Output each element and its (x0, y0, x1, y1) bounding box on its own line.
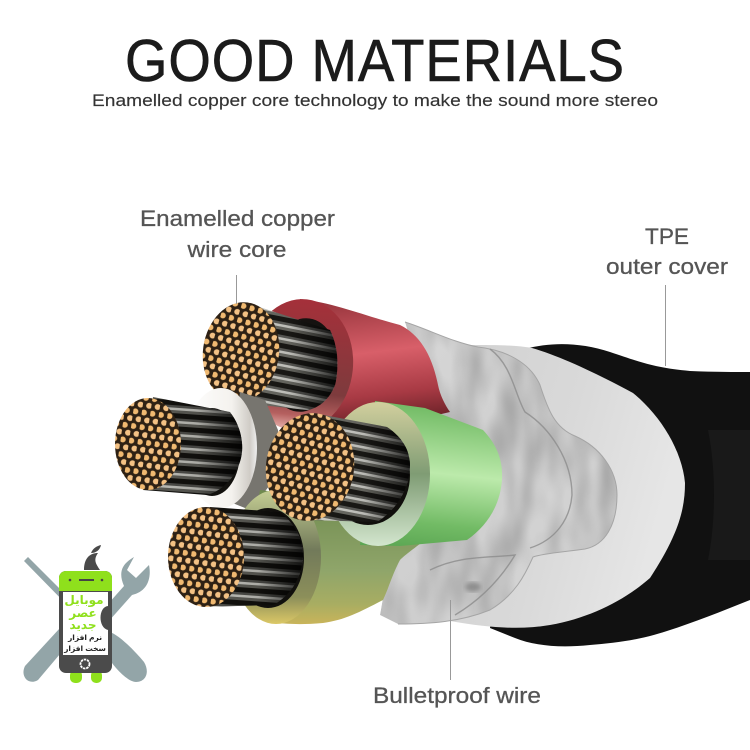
label: TPE outer cover (606, 224, 728, 279)
icon: wrench (23, 557, 150, 682)
subtitle: Enamelled copper core technology to make the sound more stereo (92, 91, 658, 110)
phone feet (70, 670, 102, 683)
phone top green (59, 571, 112, 591)
label: enamelled copper wire core: Enamelled copper (140, 206, 335, 231)
olive hole (232, 508, 304, 608)
logo text black: سخت افزار (63, 644, 106, 653)
red core copper face (196, 297, 286, 407)
label: bulletproof wire: Bulletproof wire (373, 683, 541, 708)
red core wires (233, 303, 337, 410)
icon: screwdriver (24, 557, 147, 682)
leader line: copper core (236, 275, 237, 304)
olive body (240, 490, 425, 624)
phone screen (63, 592, 108, 655)
label: enamelled copper wire core (140, 206, 335, 262)
white core wires (143, 397, 242, 495)
green core wires (307, 413, 410, 522)
green rim (326, 402, 430, 546)
white body (225, 392, 282, 510)
olive conductor (168, 490, 425, 624)
green hole (326, 425, 410, 525)
red conductor (196, 294, 450, 440)
title: GOOD MATERIALS (125, 28, 625, 94)
phone speaker (69, 579, 103, 581)
label: enamelled copper wire core: wire core (186, 237, 286, 262)
label: TPE outer cover: TPE (645, 224, 689, 249)
red body (280, 299, 450, 440)
logo text green: عصر (68, 606, 97, 620)
TPE black outer cover (490, 344, 750, 646)
leader line: bulletproof wire (450, 600, 451, 680)
logo text green: جدید (69, 618, 97, 632)
white rim (185, 388, 257, 508)
phone body (59, 571, 112, 673)
white conductor (115, 388, 282, 510)
olive core wires (203, 507, 303, 607)
foil folds (430, 349, 572, 615)
logo text green: موبایل (64, 593, 104, 608)
red rim (240, 294, 360, 436)
olive core copper face (168, 507, 244, 607)
logo text black (63, 633, 106, 653)
green conductor (259, 401, 502, 546)
white core copper face (115, 398, 181, 490)
green core copper face (259, 407, 361, 527)
red hole (263, 314, 343, 416)
logo text green (64, 593, 104, 632)
bulletproof foil braid (380, 322, 617, 624)
white hole (184, 408, 240, 496)
leader line: outer cover (665, 285, 666, 366)
cable illustration (115, 294, 750, 646)
white inner insulation (420, 345, 685, 628)
phone gear button (80, 660, 90, 668)
foil dent (465, 582, 481, 592)
green body (360, 401, 502, 546)
icon: apple (84, 545, 101, 570)
logo text black: نرم افزار (67, 633, 102, 642)
label: TPE outer cover: outer cover (606, 254, 728, 279)
olive rim (231, 490, 321, 624)
logo: mobile repair badge (23, 545, 150, 683)
foil outline (398, 322, 617, 624)
